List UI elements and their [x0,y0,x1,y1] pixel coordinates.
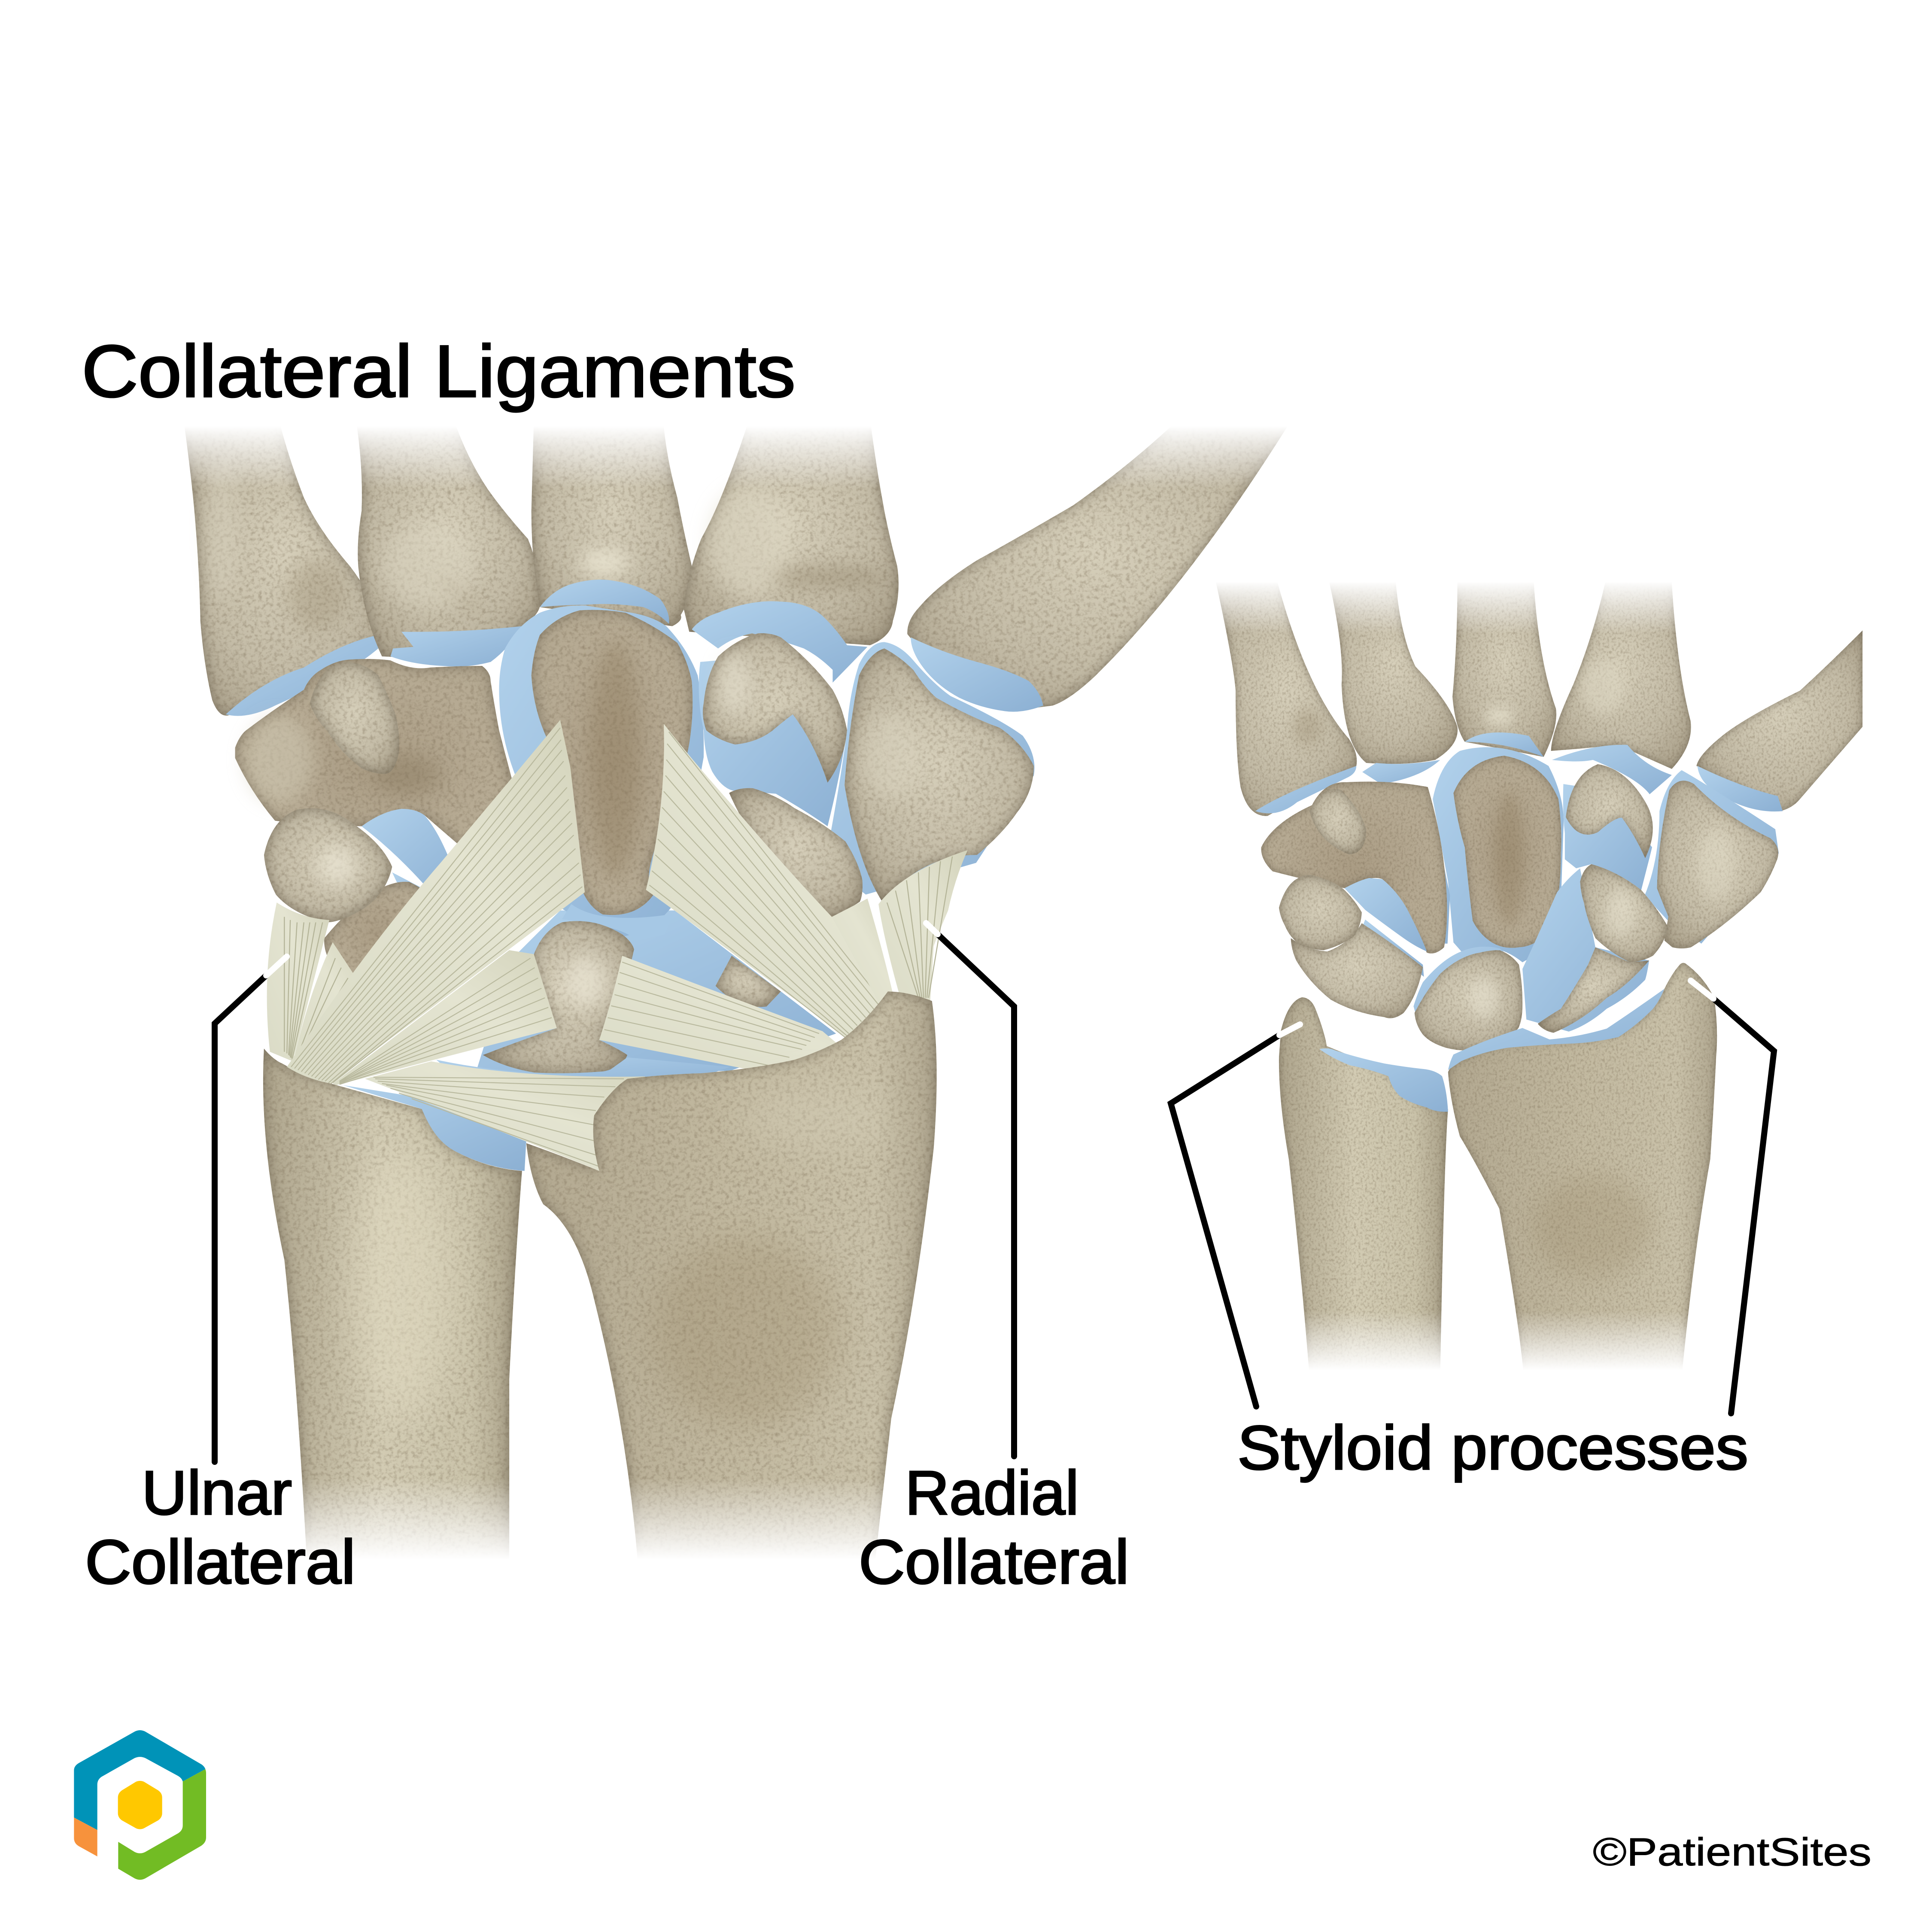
metacarpal: little finger [1216,582,1357,816]
cartilage below capitate [562,904,674,941]
right styloid leader line [1691,981,1774,1413]
trapezoid bone with cartilage [699,633,847,826]
hamate bone [1261,782,1450,954]
ulna bone with cartilage [1279,997,1448,1377]
trapezium bone with cartilage [825,642,1034,902]
wrist ligament: centre left band [333,950,557,1085]
fade at bottom of forearm bones [1297,1311,1696,1383]
lunate bone [483,921,634,1075]
label: radial collateral [859,1458,1129,1597]
metacarpal: little finger [183,418,386,716]
capitate bone with cartilage [499,605,704,938]
fade at bottom of forearm bones [280,1478,942,1577]
metacarpal: index finger [683,418,899,683]
metacarpal: thumb [907,422,1290,712]
small carpal bone [716,956,781,1007]
label: ulnar collateral [85,1458,355,1597]
fade at top of metacarpals [1199,567,1701,633]
ulna bone with cartilage [263,1048,526,1570]
left styloid leader line [1171,1024,1300,1406]
pisiform bone [1279,875,1362,950]
scaphoid bone [729,788,863,920]
radial collateral leader line [926,923,1014,1456]
metacarpal: middle finger [1452,582,1556,757]
radius articular cartilage [1448,989,1665,1070]
label: ulnar collateral: Ulnar [142,1458,292,1528]
triquetrum bone [1291,920,1424,1018]
metacarpal: ring finger [1329,582,1458,784]
capitate bone with cartilage [1433,747,1564,962]
radius bone [526,991,937,1570]
label: styloid processes: Styloid processes [1237,1413,1748,1482]
metacarpal: index finger [1551,582,1691,794]
lunate bone with cartilage [1413,947,1522,1051]
copyright: ©PatientSites [1593,1830,1871,1874]
label: radial collateral: Collateral [859,1527,1129,1597]
metacarpal: ring finger [355,418,540,667]
scaphoid bone with cartilage [1522,864,1668,1033]
metacarpal: thumb [1696,630,1862,811]
hamate bone [235,659,513,899]
trapezium bone with cartilage [1645,770,1779,948]
title: Collateral Ligaments [82,330,796,413]
wrist ligament: centre right band [599,956,849,1085]
radius bone [1448,963,1717,1377]
radial collateral ligament [878,850,968,1014]
wrist ligament: large right fan [646,724,908,1061]
smaller wrist illustration showing styloid processes [1199,567,1862,1383]
label: ulnar collateral: Collateral [85,1527,355,1597]
triquetrum bone [324,872,450,986]
trapezoid bone with cartilage [1563,764,1653,890]
ulnar collateral leader line [215,957,287,1462]
ulnar collateral ligament [267,902,367,1063]
label: radial collateral: Radial [905,1458,1079,1528]
large wrist illustration with collateral ligaments [128,409,1331,1577]
metacarpal: middle finger [532,418,692,626]
logo: PatientSites hexagon [74,1730,206,1880]
pisiform bone [264,808,392,922]
cartilage backing behind central carpals [475,911,836,1074]
small ligament near trapezium [832,899,893,1010]
wrist ligament: large left fan [287,720,585,1084]
fade at top of metacarpals [128,409,1331,488]
radius articular cartilage [436,1057,730,1089]
wrist ligament: lower band [365,1061,653,1173]
